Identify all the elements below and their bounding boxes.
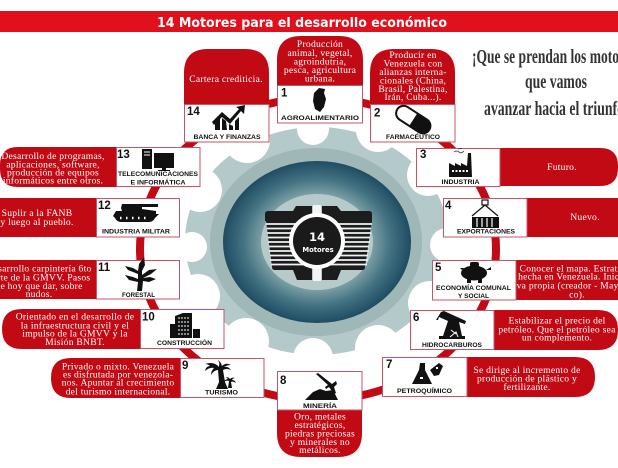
card 6: hidrocarburos: un complemento. [522,333,592,344]
card 10: construccion: impulso de la GMVV y la [22,329,128,340]
red connecting ring [140,98,496,400]
slogan: que vamos [525,71,587,93]
icon: factory [449,153,472,177]
card 1: agroalimentario: AGROALIMENTARIO [281,115,359,122]
card 8: mineria: 8 [280,375,287,387]
card 13: telecomunicaciones: E INFORMÁTICA [130,178,186,186]
card 6: hidrocarburos [410,310,618,350]
card 10: construccion: Misión BNBT. [45,337,105,348]
card 1: agroalimentario: urbana. [305,73,335,84]
card 7: petroquimico [382,357,595,397]
card 12: industria militar: y luego al pueblo. [0,217,74,228]
card 12: industria militar: Suplir a la FANB [2,208,72,219]
card 9: turismo: 9 [182,360,188,372]
card 2: farmaceutico: Irán, Cuba...). [384,92,442,103]
card 13: telecomunicaciones: Desarrollo de programas, [1,151,105,162]
card 4: exportaciones: 4 [445,200,452,212]
engine icon: Motores [302,246,334,254]
title banner [0,11,618,32]
card 1: agroalimentario: pesca, agricultura [284,65,357,76]
icon: tank [113,204,159,222]
card 1: agroalimentario [277,36,363,123]
card 1: agroalimentario: Producción [297,39,343,50]
card 12: industria militar [0,198,180,237]
card 7: petroquimico: producción de plástico y [477,374,577,385]
card 14: banca y finanzas: 14 [187,106,200,118]
card 5: economia comunal y social: Y SOCIAL [458,293,489,300]
icon: oil pump [436,311,466,339]
card 10: construccion: la infraestructura civil y el [21,320,129,331]
icon: container on hook [472,200,499,228]
title banner: 14 Motores para el desarrollo económico [157,16,447,31]
card 12: industria militar: 12 [98,200,111,212]
card 11: forestal: 11 [98,262,111,274]
icon: mining pick [305,373,338,400]
icon: palm trees [205,360,231,389]
card 13: telecomunicaciones: aplicaciones, software, [6,159,100,170]
card 11: forestal [0,257,180,300]
card 7: petroquimico: Se dirige al incremento de [473,365,581,376]
card 10: construccion: CONSTRUCCIÓN [157,338,212,347]
card 10: construccion: 10 [142,312,155,324]
card 2: farmaceutico: cionales (China, [380,76,446,87]
card 2: farmaceutico: Producir en [389,50,437,61]
card 12: industria militar: INDUSTRIA MILITAR [102,228,170,236]
icon: buildings [170,313,200,338]
gear dark ring [223,161,411,323]
card 8: mineria: metálicos. [299,445,341,456]
card 9: turismo: TURISMO [205,390,238,396]
card 9: turismo: del turismo internacional. [66,387,170,398]
card 4: exportaciones: Nuevo. [570,212,600,223]
card 2: farmaceutico: alianzas interna- [379,67,447,78]
engine icon [265,205,372,281]
card 8: mineria: y minerales no [290,437,350,448]
card 4: exportaciones: EXPORTACIONES [457,228,515,236]
card 13: telecomunicaciones: producción de equipos [7,168,99,179]
icon: pill [393,103,433,136]
card 14: banca y finanzas: BANCA Y FINANZAS [194,134,261,141]
card 5: economia comunal y social: 5 [435,262,442,274]
card 14: banca y finanzas [184,49,269,142]
card 8: mineria: estratégicos, [295,420,345,431]
card 7: petroquimico: PETROQUÍMICO [397,386,452,395]
card 13: telecomunicaciones: TELECOMUNICACIONES [118,171,198,178]
card 8: mineria: MINERÍA [303,401,337,410]
card 5: economia comunal y social [432,260,618,300]
card 6: hidrocarburos: Estabilizar el precio del [508,316,606,327]
icon: corn [313,88,326,112]
card 9: turismo [51,358,264,398]
card 6: hidrocarburos: petróleo. Que el petróleo sea [498,324,616,335]
card 1: agroalimentario: agroindutria, [294,57,346,68]
card 1: agroalimentario: 1 [281,88,288,100]
slogan [472,46,618,120]
card 2: farmaceutico: Venezuela con [384,58,442,69]
card 2: farmaceutico [370,49,455,142]
gear outer ring [210,148,422,336]
card 9: turismo: nos. Apuntar al crecimiento [62,378,174,389]
card 11: forestal: FORESTAL [122,292,155,299]
gear inner disc [261,194,373,290]
card 7: petroquimico: 7 [386,359,392,371]
card 8: mineria [277,372,362,457]
card 3: industria: INDUSTRIA [442,179,480,186]
card 8: mineria: Oro, metales [294,412,346,422]
card 3: industria: Futuro. [547,162,577,173]
card 7: petroquimico: fertilizante. [503,382,551,393]
card 8: mineria: piedras preciosas [285,428,355,440]
card 9: turismo: es disfrutada por venezola- [63,370,173,381]
engine icon: 14 [309,230,325,244]
card 10: construccion [2,309,224,349]
card 9: turismo: Privado o mixto. Venezuela [62,362,175,373]
card 2: farmaceutico: 2 [374,108,380,120]
card 4: exportaciones [444,198,618,237]
card 6: hidrocarburos: HIDROCARBUROS [422,342,482,349]
card 6: hidrocarburos: 6 [413,312,419,324]
card 5: economia comunal y social: co). [569,289,585,300]
card 11: forestal: nudos. [26,289,52,300]
card 2: farmaceutico: Brasil, Palestina, [378,84,448,95]
icon: plant [125,257,157,291]
icon: piggy bank [460,262,491,283]
card 13: telecomunicaciones: informáticos entre otros. [3,176,103,187]
central gear [176,108,464,378]
card 3: industria: 3 [420,149,426,161]
card 10: construccion: Orientado en el desarrollo de [16,312,134,323]
icon: flask [412,363,443,384]
card 14: banca y finanzas: Cartera crediticia. [189,74,263,85]
card 13: telecomunicaciones: 13 [117,149,130,161]
card 3: industria [416,148,618,186]
card 13: telecomunicaciones [0,147,200,187]
icon: computer [142,149,174,171]
card 5: economia comunal y social: ECONOMÍA COMUNAL [436,283,511,292]
icon: growth chart [212,105,245,130]
card 1: agroalimentario: animal, vegetal, [287,48,353,59]
card 2: farmaceutico: FARMACÉUTICO [386,132,440,141]
